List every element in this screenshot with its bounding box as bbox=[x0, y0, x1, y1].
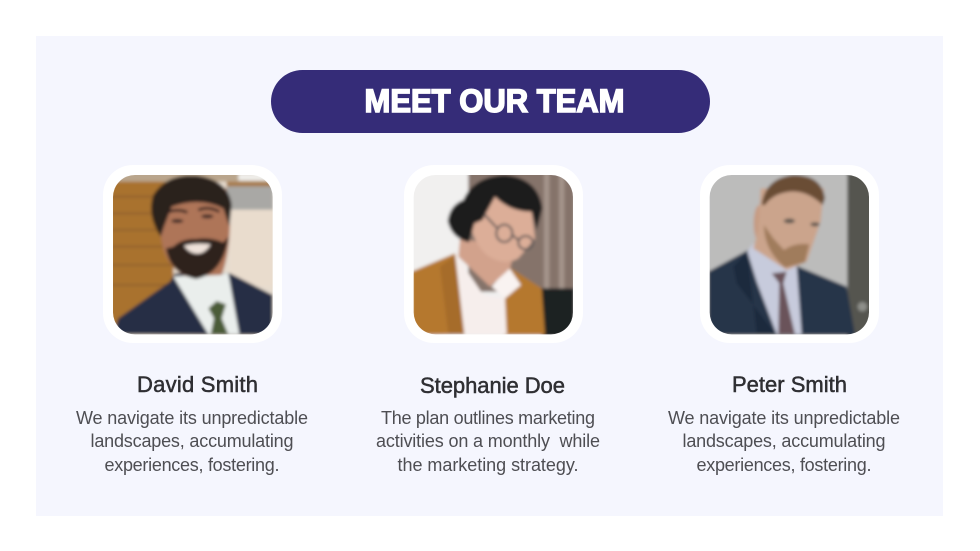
card: David Smith bbox=[76, 165, 308, 475]
name: Peter Smith: Peter Smith bbox=[732, 372, 847, 397]
description: David Smith: We navigate its unpredictable bbox=[76, 408, 308, 428]
description: Stephanie Doe bbox=[376, 408, 600, 475]
description: David Smith bbox=[76, 408, 308, 475]
title banner: MEET OUR TEAM bbox=[364, 83, 624, 119]
photo: David Smith bbox=[103, 165, 282, 343]
description: Peter Smith: We navigate its unpredictable bbox=[668, 408, 900, 428]
card: Stephanie Doe bbox=[376, 165, 600, 475]
photo: Peter Smith bbox=[700, 165, 879, 343]
photo: Stephanie Doe bbox=[404, 165, 583, 343]
description: Stephanie Doe: activities on a monthly while bbox=[376, 431, 600, 451]
description: Peter Smith: landscapes, accumulating bbox=[682, 431, 886, 451]
description: David Smith: landscapes, accumulating bbox=[90, 431, 294, 451]
description: Stephanie Doe: The plan outlines marketing bbox=[381, 408, 595, 428]
card: Peter Smith bbox=[668, 165, 900, 475]
name: Stephanie Doe: Stephanie Doe bbox=[420, 373, 565, 398]
description: Peter Smith: experiences, fostering. bbox=[696, 455, 872, 475]
title banner bbox=[271, 70, 710, 133]
description: Peter Smith bbox=[668, 408, 900, 475]
description: Stephanie Doe: the marketing strategy. bbox=[398, 455, 578, 475]
name: David Smith: David Smith bbox=[137, 372, 258, 397]
description: David Smith: experiences, fostering. bbox=[104, 455, 280, 475]
